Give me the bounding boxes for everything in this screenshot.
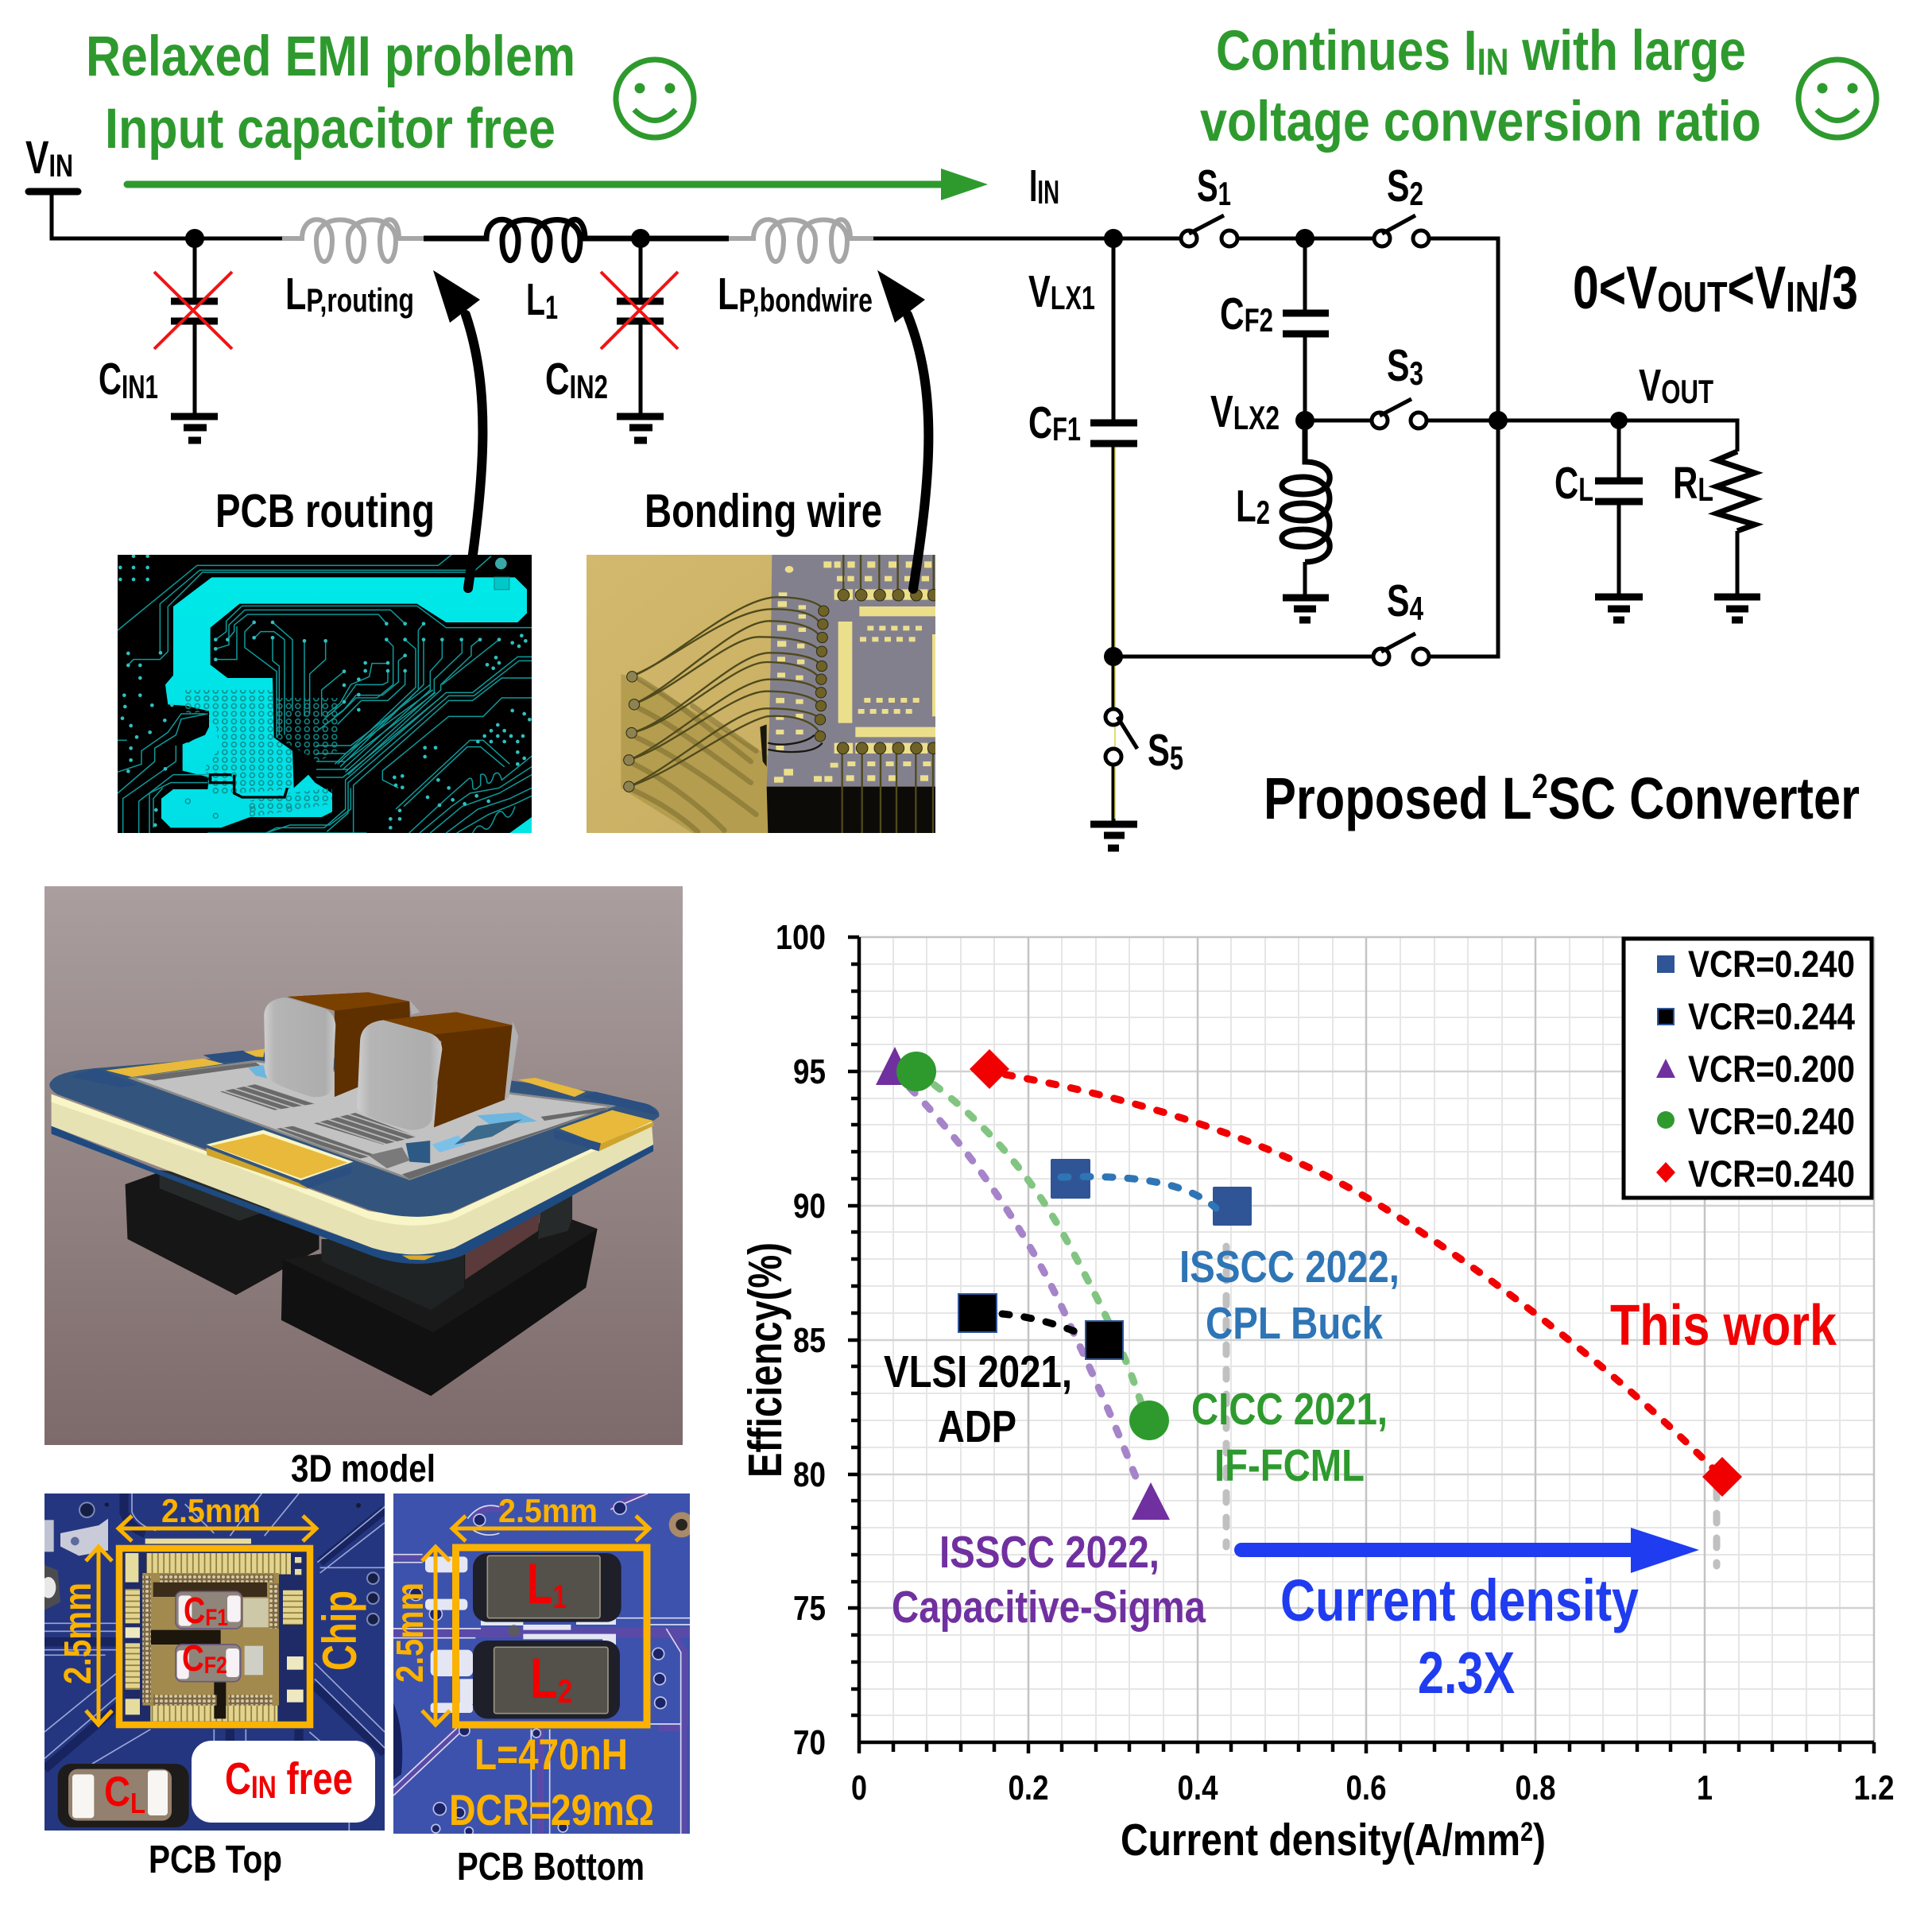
- circuit labels right: [1028, 161, 1858, 777]
- inductor: LP routing: [282, 219, 424, 262]
- circuit labels right: IN: [1786, 273, 1819, 321]
- circuit labels right: LX1: [1051, 279, 1095, 316]
- annotation: CICC IF-FCML: IF-FCML: [1214, 1440, 1365, 1491]
- labels: PCB bottom orange: L=470nH: [474, 1730, 628, 1779]
- y axis labels: 95: [793, 1052, 826, 1091]
- labels: PCB top red: F1: [205, 1605, 228, 1631]
- labels: PCB top red: F2: [204, 1652, 227, 1679]
- caption: 3D model: 3D model: [291, 1448, 436, 1490]
- labels: PCB top red: [104, 1590, 228, 1819]
- y axis labels: 85: [793, 1321, 826, 1360]
- heading: relaxed EMI: [86, 25, 575, 161]
- panel: 3D model render: [45, 886, 683, 1445]
- circuit: input network: [25, 132, 882, 537]
- circuit labels left: Bonding wire: [645, 485, 882, 537]
- annotation: ISSCC capacitive-sigma: [892, 1527, 1206, 1633]
- annotations: PCB bottom dimension: [422, 1516, 649, 1725]
- circuit labels right: /3: [1819, 254, 1858, 322]
- callout: CIN free: C: [225, 1753, 257, 1804]
- CIN1 capacitor with red cross: [154, 229, 232, 440]
- circuit labels right: V: [1639, 360, 1669, 411]
- heading: continues IIN: voltage conversion ratio: [1200, 91, 1761, 153]
- y axis labels: 80: [793, 1455, 826, 1494]
- circuit labels right: S: [1387, 340, 1417, 391]
- labels: PCB bottom orange: [389, 1492, 654, 1834]
- circuit labels left: [25, 132, 882, 537]
- title: Proposed L2SC Converter: Proposed L: [1264, 765, 1587, 831]
- labels: PCB top red: L: [130, 1787, 145, 1819]
- main wires: [873, 238, 1737, 824]
- inductor: LP bondwire: [729, 219, 873, 262]
- resistor: RL: [1717, 451, 1755, 531]
- circuit labels right: F1: [1052, 410, 1081, 447]
- annotation: CICC IF-FCML: CICC 2021,: [1191, 1384, 1388, 1435]
- heading: continues IIN: IN: [1477, 41, 1509, 83]
- inductor: L2: [1282, 420, 1330, 562]
- circuit labels right: I: [1029, 161, 1042, 211]
- circuit labels right: V: [1028, 266, 1059, 317]
- circuit labels left: P,bondwire: [739, 281, 873, 319]
- icon: smiley left: [616, 60, 694, 138]
- curve: this work: [970, 1049, 1742, 1497]
- annotation: current density 2.3X: [1280, 1567, 1639, 1706]
- inductor: L1: [424, 219, 729, 261]
- legend: VCR=0.240: [1688, 1153, 1855, 1195]
- circuit labels right: <V: [1728, 254, 1786, 322]
- legend: VCR=0.240: [1688, 1100, 1855, 1142]
- circuit labels right: S: [1197, 161, 1227, 211]
- circuit labels left: PCB routing: [215, 485, 435, 537]
- callout: CIN free: [192, 1741, 375, 1823]
- circuit labels right: 0<V: [1573, 254, 1682, 322]
- circuit labels right: LX2: [1233, 399, 1280, 436]
- x axis labels: 0.8: [1515, 1769, 1556, 1807]
- circuit labels right: 5: [1170, 739, 1183, 777]
- circuit labels right: IN: [1037, 173, 1059, 211]
- circuit labels right: V: [1210, 386, 1241, 437]
- annotation: ISSCC CPL Buck: CPL Buck: [1206, 1298, 1383, 1349]
- curve: ISSCC 2022 capacitive-sigma: [876, 1047, 1170, 1520]
- circuit labels left: P,routing: [306, 281, 414, 319]
- x axis labels: 1.2: [1853, 1769, 1895, 1807]
- x axis labels: 0.2: [1008, 1769, 1049, 1807]
- labels: L1 L2 red: L: [527, 1553, 561, 1616]
- circuit labels left: IN1: [122, 368, 158, 405]
- x axis labels: 0: [851, 1769, 867, 1807]
- circuit labels left: V: [25, 132, 56, 184]
- switch S2: [1374, 215, 1429, 246]
- circuit labels right: L: [1236, 481, 1264, 532]
- circuit labels right: R: [1673, 458, 1706, 509]
- circuit labels right: S: [1148, 725, 1178, 776]
- annotations: PCB top dimension: [86, 1516, 316, 1725]
- y axis labels: 70: [793, 1723, 826, 1762]
- legend: VCR=0.200: [1688, 1048, 1855, 1090]
- circuit labels left: IN: [48, 149, 73, 184]
- labels: PCB bottom orange: DCR=29mΩ: [449, 1785, 654, 1834]
- labels: L1 L2 red: 2: [557, 1672, 572, 1710]
- x axis labels: 1: [1697, 1769, 1713, 1807]
- callout: CIN free: IN: [251, 1770, 277, 1805]
- legend: VCR=0.244: [1688, 995, 1855, 1037]
- circuit labels left: C: [99, 354, 131, 405]
- y axis title: Efficiency(%): [739, 1242, 792, 1478]
- labels: L1 L2 red: [527, 1553, 572, 1710]
- circuit labels right: C: [1555, 458, 1587, 509]
- labels: PCB top red: C: [182, 1637, 208, 1679]
- title: Proposed L2SC Converter: 2: [1532, 767, 1548, 806]
- circuit labels right: 3: [1409, 354, 1423, 392]
- switch S1: [1181, 215, 1237, 246]
- heading: relaxed EMI: Input capacitor free: [105, 98, 556, 161]
- heading: continues IIN: [1200, 20, 1761, 153]
- annotation: This work: This work: [1610, 1294, 1837, 1358]
- switch S4: [1373, 633, 1429, 664]
- heading: continues IIN: with large: [1509, 20, 1746, 83]
- circuit labels right: OUT: [1661, 373, 1713, 410]
- x axis title: 2: [1520, 1817, 1533, 1847]
- chart: efficiency vs current density: [739, 918, 1895, 1865]
- caption: PCB Bottom: PCB Bottom: [457, 1846, 645, 1889]
- heading: continues IIN: Continues I: [1216, 20, 1524, 83]
- panel: PCB top photo: [45, 1494, 385, 1831]
- annotation: ISSCC CPL Buck: ISSCC 2022,: [1179, 1242, 1400, 1292]
- ground symbols: [1090, 597, 1760, 848]
- labels: PCB top red: C: [184, 1590, 210, 1631]
- circuit labels right: 1: [1218, 175, 1231, 212]
- circuit labels right: 4: [1409, 590, 1423, 627]
- circuit labels right: S: [1387, 161, 1417, 211]
- CIN2 capacitor with red cross: [601, 229, 678, 440]
- circuit labels left: L: [285, 269, 313, 320]
- labels: PCB top orange: 2.5mm: [161, 1492, 261, 1529]
- legend: VCR=0.240: [1688, 943, 1855, 985]
- y axis labels: [776, 918, 826, 1762]
- arrow: current density improvement: [1241, 1528, 1699, 1573]
- circuit labels right: 2: [1256, 494, 1270, 531]
- labels: PCB top orange: Chip: [313, 1590, 366, 1671]
- curve: VLSI 2021 ADP: [958, 1294, 1123, 1359]
- y axis labels: 100: [776, 918, 826, 957]
- circuit labels right: L: [1578, 471, 1593, 508]
- x axis labels: 0.4: [1178, 1769, 1218, 1807]
- annotation: ISSCC capacitive-sigma: Capacitive-Sigma: [892, 1582, 1206, 1633]
- circuit: switched-capacitor converter: [873, 161, 1858, 848]
- y axis labels: 90: [793, 1187, 826, 1226]
- photo: bonding wire: [587, 555, 935, 833]
- x axis labels: [851, 1769, 1895, 1807]
- legend: [1624, 939, 1872, 1198]
- curve: ISSCC 2022 CPL buck: [1051, 1159, 1252, 1226]
- circuit labels right: C: [1028, 397, 1061, 448]
- interposer board and capacitors: [49, 992, 660, 1264]
- annotation: current density 2.3X: 2.3X: [1418, 1640, 1515, 1706]
- labels: PCB top red: C: [104, 1769, 134, 1815]
- circuit labels left: L: [718, 269, 745, 320]
- circuit labels right: 2: [1409, 175, 1423, 212]
- background and inductor blocks: [45, 886, 683, 1445]
- heading: relaxed EMI: Relaxed EMI problem: [86, 25, 575, 88]
- photo: PCB routing: [118, 555, 532, 833]
- labels: L1 L2 red: L: [530, 1648, 564, 1710]
- annotation: VLSI ADP: VLSI 2021,: [884, 1346, 1072, 1397]
- nodes: [1104, 229, 1628, 666]
- y axis labels: 75: [793, 1589, 826, 1628]
- annotation: CICC IF-FCML: [1191, 1384, 1388, 1491]
- annotation: ISSCC CPL Buck: [1179, 1242, 1400, 1349]
- switch S5: [1105, 709, 1137, 765]
- circuit labels right: C: [1220, 289, 1253, 339]
- circuit labels right: F2: [1245, 301, 1273, 339]
- title: Proposed L2SC Converter: SC Converter: [1548, 765, 1860, 831]
- axes and ticks: [848, 937, 1874, 1753]
- x axis labels: 0.6: [1346, 1769, 1386, 1807]
- capacitors CF1 CF2 CL: [1090, 313, 1643, 502]
- circuit labels left: 1: [545, 289, 558, 326]
- circuit labels right: L: [1698, 471, 1713, 508]
- x axis title: ): [1533, 1815, 1546, 1865]
- x axis title: Current density(A/mm: [1121, 1815, 1597, 1865]
- circuit labels left: IN2: [570, 368, 608, 405]
- icon: smiley right: [1798, 60, 1876, 138]
- circuit labels left: C: [545, 354, 578, 405]
- circuit labels right: S: [1387, 575, 1417, 626]
- labels: PCB bottom orange: 2.5mm: [389, 1583, 432, 1683]
- arrow: PCB routing to LP: [433, 270, 482, 588]
- arrow: bonding wire to LP: [877, 270, 928, 589]
- arrow: green current flow: [127, 169, 988, 200]
- labels: PCB top orange: [57, 1492, 366, 1684]
- annotation: ISSCC capacitive-sigma: ISSCC 2022,: [939, 1527, 1160, 1578]
- labels: PCB bottom orange: 2.5mm: [498, 1492, 598, 1529]
- annotation: current density 2.3X: Current density: [1280, 1567, 1639, 1633]
- caption: PCB Top: PCB Top: [149, 1838, 282, 1881]
- labels: L1 L2 red: 1: [552, 1578, 567, 1615]
- circuit labels right: OUT: [1657, 273, 1728, 321]
- reference guide lines: [1226, 1246, 1717, 1566]
- panel: PCB bottom photo: [393, 1494, 690, 1834]
- circuit labels left: L: [526, 274, 554, 325]
- callout: CIN free: free: [277, 1753, 353, 1804]
- labels: PCB top orange: 2.5mm: [57, 1583, 99, 1684]
- annotation: VLSI ADP: ADP: [938, 1401, 1016, 1452]
- curve: CICC 2021 IF-FCML: [896, 1052, 1169, 1440]
- annotation: VLSI ADP: [884, 1346, 1072, 1452]
- switch S3: [1372, 399, 1427, 428]
- VIN terminal: [29, 192, 282, 238]
